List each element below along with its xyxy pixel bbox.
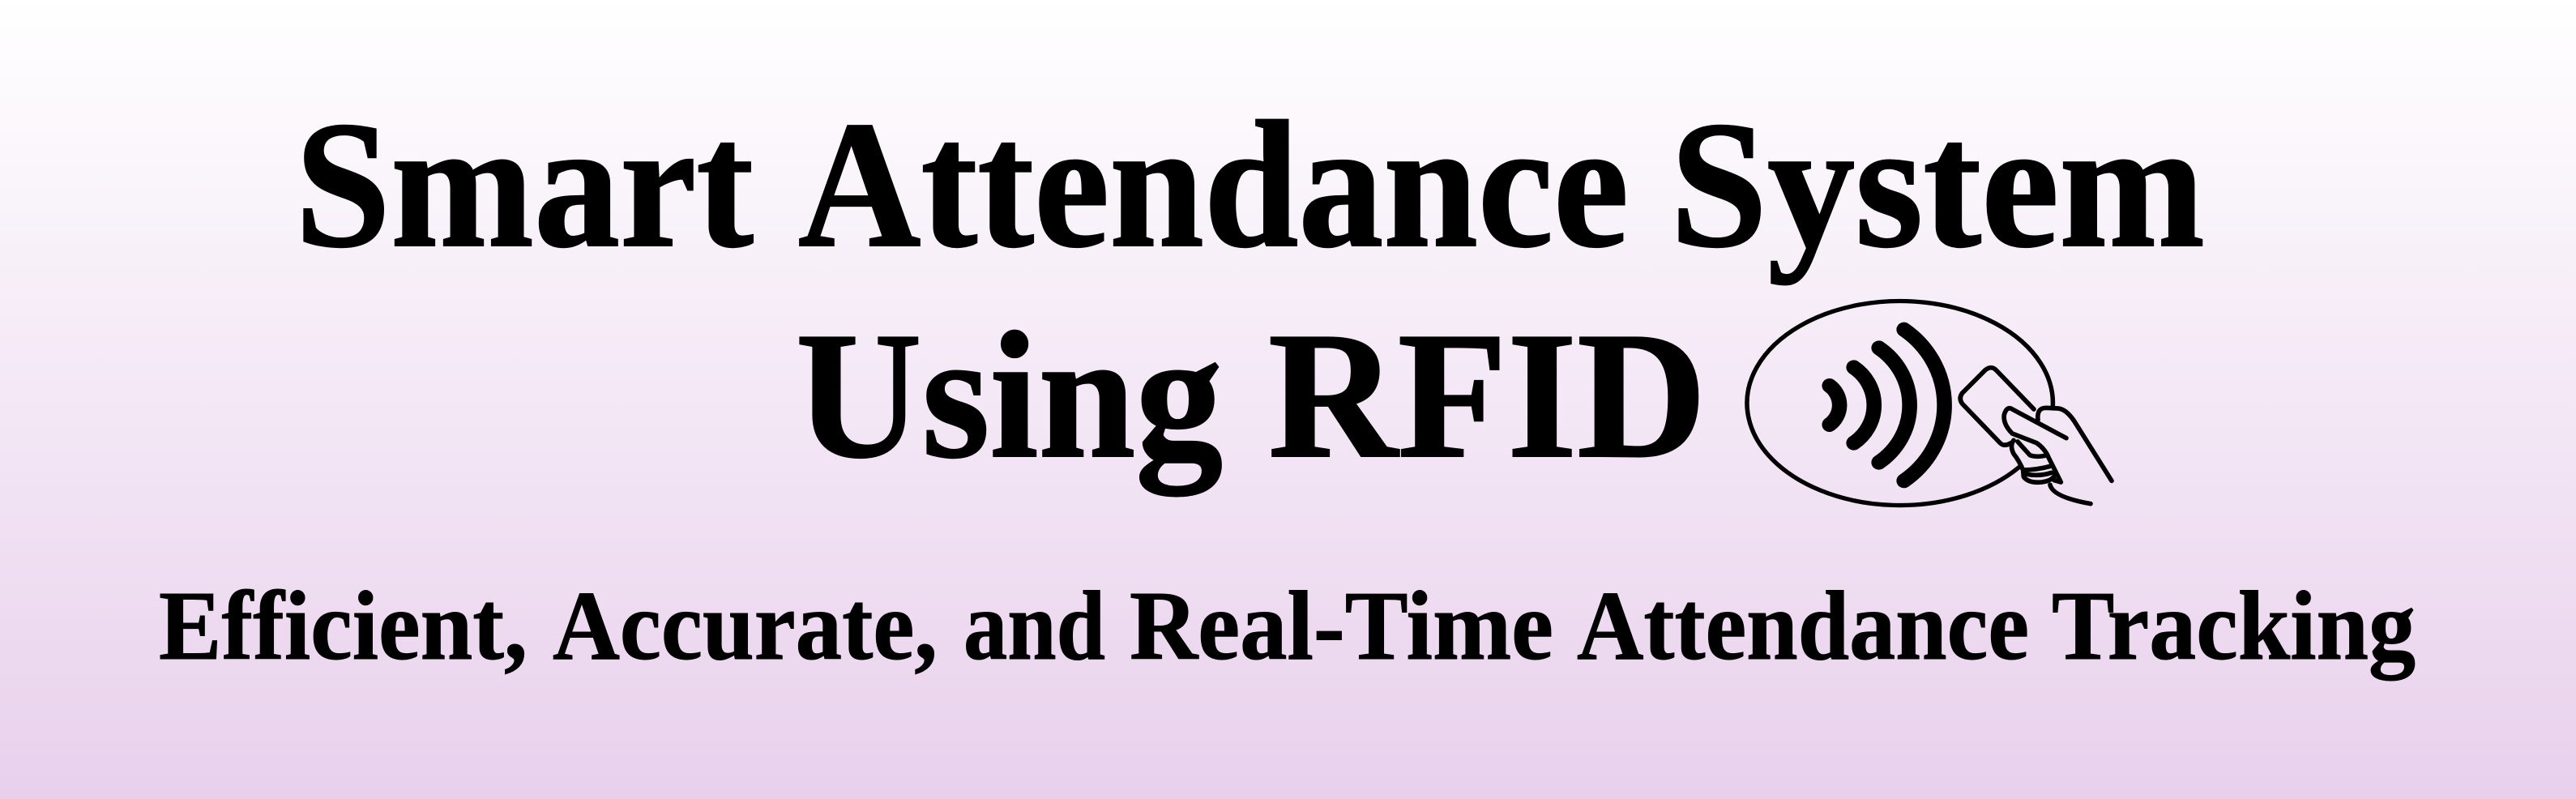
- title line 2: [796, 295, 1707, 497]
- subtitle: and: [963, 571, 1105, 681]
- title line 1: Smart: [295, 84, 754, 285]
- icon: contactless RFID card tap: [1747, 301, 2112, 506]
- subtitle: Accurate,: [553, 571, 938, 681]
- subtitle: Real-Time: [1130, 571, 1553, 681]
- subtitle: Tracking: [2052, 571, 2416, 681]
- title line 2: RFID: [1268, 295, 1707, 496]
- subtitle: Efficient,: [159, 571, 528, 681]
- subtitle: [159, 571, 2416, 681]
- icon: reader ellipse outline: [1747, 301, 2053, 506]
- icon: hand: [2004, 408, 2112, 504]
- icon: card: [1960, 368, 2034, 445]
- title line 1: Attendance: [798, 84, 1629, 285]
- title line 1: [295, 84, 2205, 285]
- subtitle: Attendance: [1577, 571, 2029, 681]
- icon: radio waves: [1830, 330, 1945, 481]
- title line 2: Using: [796, 295, 1223, 497]
- title line 1: System: [1670, 84, 2205, 285]
